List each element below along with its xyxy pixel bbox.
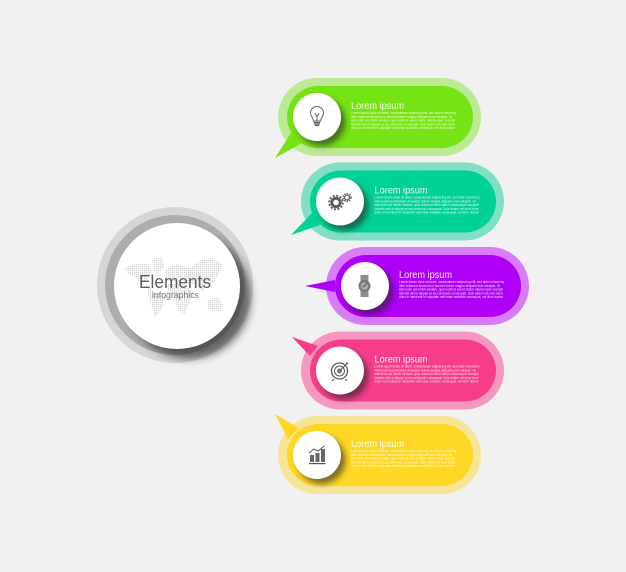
icon: wristwatch <box>358 275 370 297</box>
text: step 5 <box>351 438 456 468</box>
text: step 3: lobortis nisl ut aliquip ex ea commodo consequat. Duis autem vel eum iriure <box>399 291 503 295</box>
speech tail <box>275 414 299 439</box>
text: step 4: Lorem ipsum dolor sit amet, consectetuer adipiscing elit, sed diam nonummy <box>374 364 480 368</box>
text: step 4: wisi enim ad minim veniam, quis nostrud exerci tation ullamcorper suscipit <box>374 372 479 376</box>
text: step 5: Lorem ipsum <box>351 438 404 450</box>
white circle <box>316 346 364 394</box>
outer band <box>326 247 529 325</box>
circle shadow <box>320 352 368 400</box>
text: step 5: dolor in hendrerit in vulputate velit esse molestie consequat, vel illum dolore <box>351 464 455 468</box>
text: step 2: Lorem ipsum dolor sit amet, consectetuer adipiscing elit, sed diam nonummy <box>374 196 480 200</box>
white circle <box>341 262 389 310</box>
speech tail <box>291 213 320 235</box>
text: step 4: Lorem ipsum <box>374 354 428 366</box>
outer band <box>278 416 481 494</box>
circle shadow <box>298 98 346 146</box>
text: step 1: nibh euismod tincidunt ut laoreet dolore magna aliquam erat volutpat. Ut <box>351 115 452 119</box>
inner pill <box>287 424 473 486</box>
text: step 1: Lorem ipsum <box>351 100 404 112</box>
text: step 3: Lorem ipsum dolor sit amet, consectetuer adipiscing elit, sed diam nonummy <box>399 280 504 284</box>
text: step 5: nibh euismod tincidunt ut laoreet dolore magna aliquam erat volutpat. Ut <box>351 453 452 457</box>
circle drop shadow <box>127 235 251 359</box>
inner pill <box>335 255 521 317</box>
white circle <box>293 93 341 141</box>
outer band <box>301 162 504 240</box>
icon: light bulb <box>310 107 324 126</box>
panel: step 5 yellow <box>275 414 481 494</box>
text: step 4: nibh euismod tincidunt ut laoreet dolore magna aliquam erat volutpat. Ut <box>374 368 476 372</box>
panel: central globe circle <box>97 207 253 363</box>
text: step 2: Lorem ipsum <box>374 184 428 196</box>
panel: step 3 purple <box>305 247 529 325</box>
heading: Elements: Elements <box>139 271 211 292</box>
inner pill <box>287 86 473 148</box>
circle shadow <box>320 182 368 230</box>
text: step 2: dolor in hendrerit in vulputate velit esse molestie consequat, vel illum dolore <box>374 211 479 215</box>
text: step 4 <box>374 354 480 384</box>
circle shadow <box>298 436 346 484</box>
text: step 1: Lorem ipsum dolor sit amet, consectetuer adipiscing elit, sed diam nonummy <box>351 111 456 115</box>
inner pill <box>310 170 496 232</box>
speech tail <box>305 280 335 292</box>
text: step 2: lobortis nisl ut aliquip ex ea commodo consequat. Duis autem vel eum iriure <box>374 207 479 211</box>
panel: step 2 teal <box>291 162 504 240</box>
text: step 4: dolor in hendrerit in vulputate velit esse molestie consequat, vel illum dolore <box>374 380 479 384</box>
text: step 1: dolor in hendrerit in vulputate velit esse molestie consequat, vel illum dolore <box>351 126 455 130</box>
text: step 4: lobortis nisl ut aliquip ex ea commodo consequat. Duis autem vel eum iriure <box>374 376 479 380</box>
outer grey ring <box>97 207 253 363</box>
subheading: infographics: infographics <box>152 290 199 301</box>
text: step 2 <box>374 184 480 215</box>
text: step 5: wisi enim ad minim veniam, quis nostrud exerci tation ullamcorper suscipit <box>351 457 455 461</box>
text: step 2: wisi enim ad minim veniam, quis nostrud exerci tation ullamcorper suscipit <box>374 203 479 207</box>
outer band <box>301 332 504 410</box>
dotted world map <box>124 256 223 318</box>
text: step 1: lobortis nisl ut aliquip ex ea commodo consequat. Duis autem vel eum iriure <box>351 122 455 126</box>
text: step 1 <box>351 100 456 130</box>
text: step 2: nibh euismod tincidunt ut laoreet dolore magna aliquam erat volutpat. Ut <box>374 199 476 203</box>
text: step 3: nibh euismod tincidunt ut laoreet dolore magna aliquam erat volutpat. Ut <box>399 284 500 288</box>
text: step 3 <box>399 269 504 299</box>
speech tail <box>292 337 318 356</box>
white circle <box>293 431 341 479</box>
middle grey ring <box>105 215 245 355</box>
panel: step 4 pink <box>292 332 504 410</box>
icon: target <box>332 362 348 381</box>
circle shadow <box>346 267 394 315</box>
inner pill <box>310 340 496 402</box>
text: step 3: wisi enim ad minim veniam, quis nostrud exerci tation ullamcorper suscipit <box>399 288 503 292</box>
text: step 1: wisi enim ad minim veniam, quis nostrud exerci tation ullamcorper suscipit <box>351 119 455 123</box>
icon: gears <box>329 194 351 209</box>
icon: growth chart <box>309 446 326 464</box>
text: step 3: dolor in hendrerit in vulputate velit esse molestie consequat, vel illum dolore <box>399 295 503 299</box>
white circle <box>316 178 364 226</box>
text: step 3: Lorem ipsum <box>399 269 452 281</box>
text: step 5: Lorem ipsum dolor sit amet, consectetuer adipiscing elit, sed diam nonummy <box>351 449 456 453</box>
text: step 5: lobortis nisl ut aliquip ex ea commodo consequat. Duis autem vel eum iriure <box>351 460 455 464</box>
white disc <box>114 223 240 349</box>
panel: step 1 green <box>275 78 481 158</box>
speech tail <box>275 133 302 158</box>
outer band <box>278 78 481 156</box>
